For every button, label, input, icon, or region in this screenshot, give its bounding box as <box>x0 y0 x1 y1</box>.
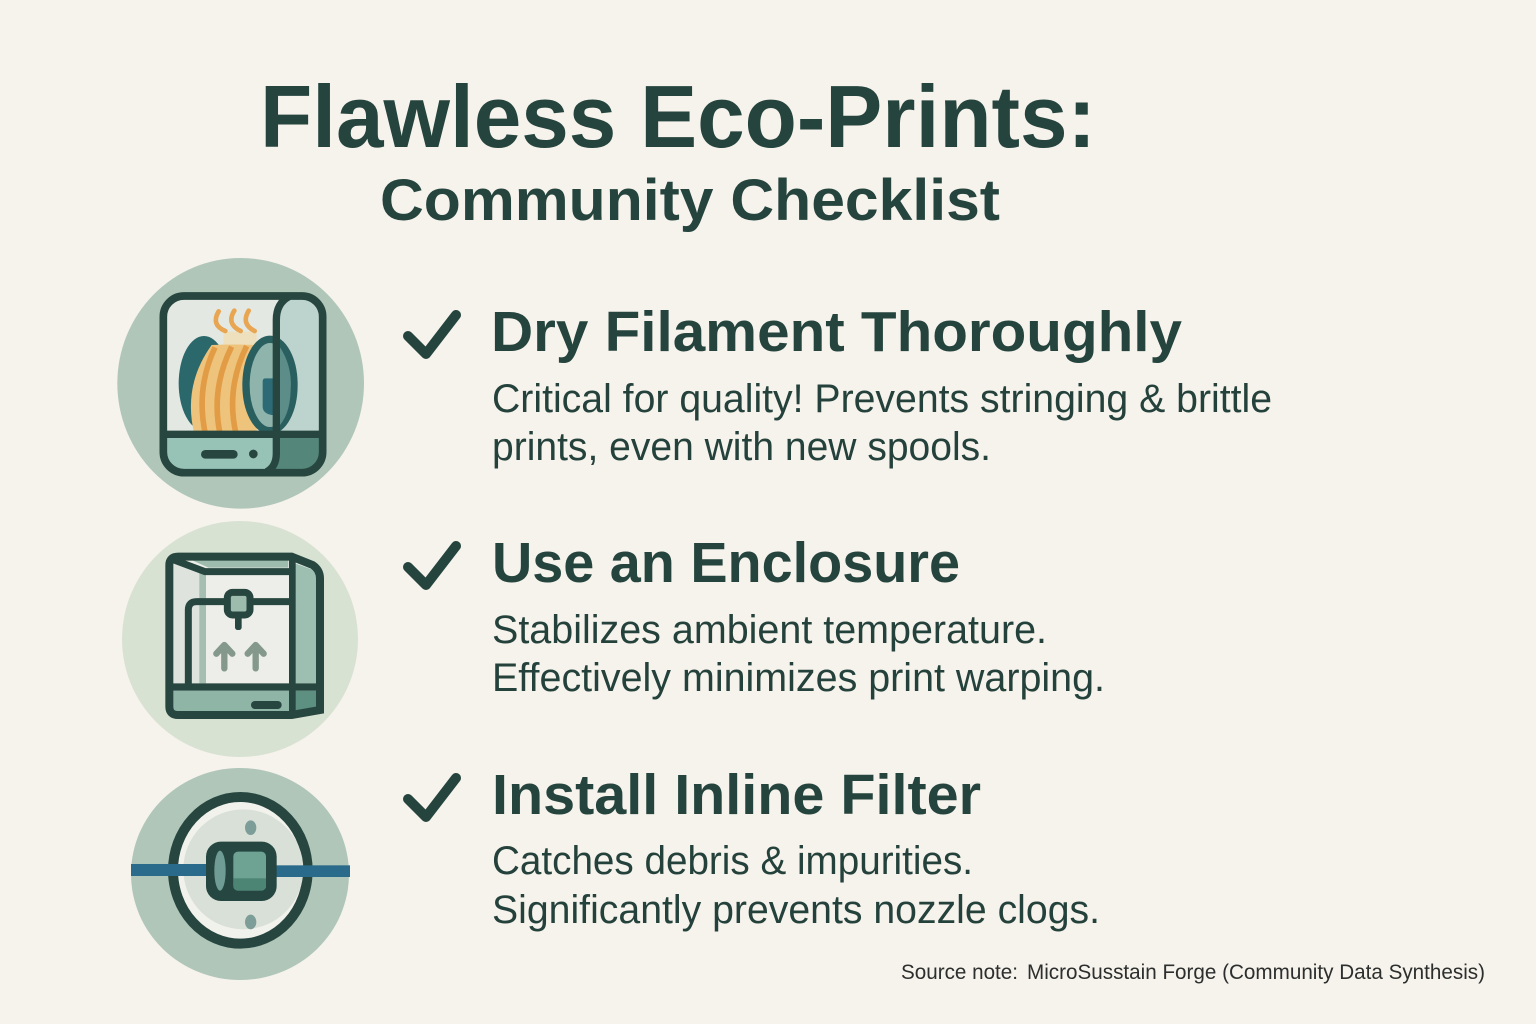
icon: inline filter <box>131 768 350 980</box>
title: Flawless Eco-Prints: <box>260 67 1096 166</box>
source note: Source note: <box>901 961 1018 984</box>
text: enclosure line 1: Stabilizes ambient temperature. <box>492 608 1047 652</box>
heading: dry filament: Dry Filament Thoroughly <box>491 300 1182 364</box>
icon: filament dryer <box>117 258 364 509</box>
heading: inline filter: Install Inline Filter <box>492 763 981 827</box>
subtitle: Community Checklist <box>380 168 1000 233</box>
panel: dry filament <box>117 258 1272 509</box>
icon: checkmark <box>408 546 456 585</box>
text: dry filament line 2: prints, even with new spools. <box>492 425 991 469</box>
icon: checkmark <box>408 778 456 817</box>
panel: inline filter <box>131 763 1100 980</box>
source note: MicroSusstain Forge (Community Data Synthesis) <box>1027 961 1485 984</box>
icon: checkmark <box>408 315 456 354</box>
text: inline filter line 2: Significantly prevents nozzle clogs. <box>492 888 1100 932</box>
text: enclosure line 2: Effectively minimizes print warping. <box>492 656 1105 700</box>
icon: enclosed printer <box>122 521 358 757</box>
panel: enclosure <box>122 521 1105 757</box>
text: dry filament line 1: Critical for quality! Prevents stringing & brittle <box>492 377 1272 421</box>
heading: enclosure: Use an Enclosure <box>492 531 960 595</box>
text: inline filter line 1: Catches debris & impurities. <box>492 839 973 883</box>
